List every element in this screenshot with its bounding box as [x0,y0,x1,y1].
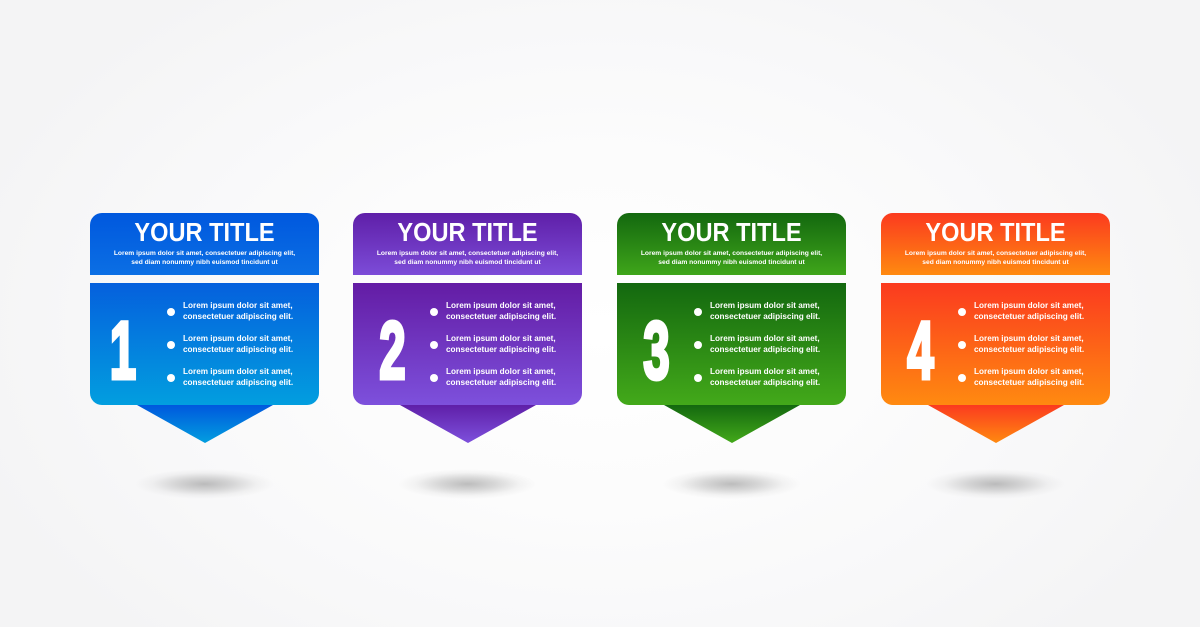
bullet 1: Lorem ipsum dolor sit amet, [974,301,1084,310]
text: step 4 subtitle [905,250,1086,266]
shadow: step 4 [926,469,1065,499]
shadow: step 3 [662,469,801,499]
text: step 1 subtitle: sed diam nonummy nibh euismod tincidunt ut [131,258,278,266]
bullet 3: Lorem ipsum dolor sit amet, [446,367,556,376]
bullet 3: consectetuer adipiscing elit. [710,378,820,387]
shadow: step 1 [135,469,274,499]
bullet 1: Lorem ipsum dolor sit amet, [446,301,556,310]
body: step 2 [353,283,582,405]
panel: step 3 green [617,213,846,496]
bullet 3: Lorem ipsum dolor sit amet, [183,367,293,376]
bullet 2: Lorem ipsum dolor sit amet, [446,334,556,343]
bullet 2 [958,334,1084,354]
body: step 4 [881,283,1110,405]
bullet 2: consectetuer adipiscing elit. [183,345,293,354]
bullet 3: Lorem ipsum dolor sit amet, [974,367,1084,376]
heading: step 2 title: YOUR TITLE [397,219,538,247]
heading: step 4 title: YOUR TITLE [925,219,1066,247]
text: step 2 subtitle: Lorem ipsum dolor sit amet, consectetuer adipiscing elit, [377,250,558,256]
bullet 2: consectetuer adipiscing elit. [710,345,820,354]
text: step 3 subtitle [641,250,822,266]
bullet 3 [958,367,1084,387]
text: step 4 subtitle: sed diam nonummy nibh euismod tincidunt ut [922,258,1069,266]
header: step 3 [617,213,846,275]
text: step 4 subtitle: Lorem ipsum dolor sit amet, consectetuer adipiscing elit, [905,250,1086,256]
bullet 1: Lorem ipsum dolor sit amet, [183,301,293,310]
arrow: step 1 [137,405,273,443]
bullet 1: Lorem ipsum dolor sit amet, [710,301,820,310]
bullet 2: Lorem ipsum dolor sit amet, [974,334,1084,343]
heading: step 3 title: YOUR TITLE [661,219,802,247]
bullet 3 [694,367,820,387]
bullet 1: consectetuer adipiscing elit. [710,312,820,321]
panel: step 1 blue [90,213,319,496]
arrow: step 4 [928,405,1064,443]
bullet 2 [430,334,556,354]
heading: step 1 title: YOUR TITLE [134,219,275,247]
bullet 2 [167,334,293,354]
text: step 3 subtitle: Lorem ipsum dolor sit amet, consectetuer adipiscing elit, [641,250,822,256]
bullet 1 [958,301,1084,321]
bullet 1: consectetuer adipiscing elit. [974,312,1084,321]
bullet 1: consectetuer adipiscing elit. [183,312,293,321]
text: step 3 subtitle: sed diam nonummy nibh euismod tincidunt ut [658,258,805,266]
bullet 3: consectetuer adipiscing elit. [446,378,556,387]
bullet 1: consectetuer adipiscing elit. [446,312,556,321]
text: step 1 subtitle [114,250,295,266]
header: step 1 [90,213,319,275]
bullet 3 [167,367,293,387]
body: step 1 [90,283,319,405]
header: step 4 [881,213,1110,275]
bullet 2: consectetuer adipiscing elit. [974,345,1084,354]
arrow: step 3 [664,405,800,443]
panel: step 2 purple [353,213,582,496]
bullet 1 [430,301,556,321]
body: step 3 [617,283,846,405]
text: step 1 subtitle: Lorem ipsum dolor sit amet, consectetuer adipiscing elit, [114,250,295,256]
bullet 3 [430,367,556,387]
bullet 3: consectetuer adipiscing elit. [974,378,1084,387]
bullet 2: Lorem ipsum dolor sit amet, [710,334,820,343]
text: step 2 subtitle [377,250,558,266]
bullet 3: Lorem ipsum dolor sit amet, [710,367,820,376]
bullet 2: Lorem ipsum dolor sit amet, [183,334,293,343]
bullet 1 [167,301,293,321]
header: step 2 [353,213,582,275]
bullet 3: consectetuer adipiscing elit. [183,378,293,387]
shadow: step 2 [398,469,537,499]
bullet 2: consectetuer adipiscing elit. [446,345,556,354]
arrow: step 2 [400,405,536,443]
bullet 1 [694,301,820,321]
text: step 2 subtitle: sed diam nonummy nibh euismod tincidunt ut [394,258,541,266]
bullet 2 [694,334,820,354]
panel: step 4 orange [881,213,1110,496]
